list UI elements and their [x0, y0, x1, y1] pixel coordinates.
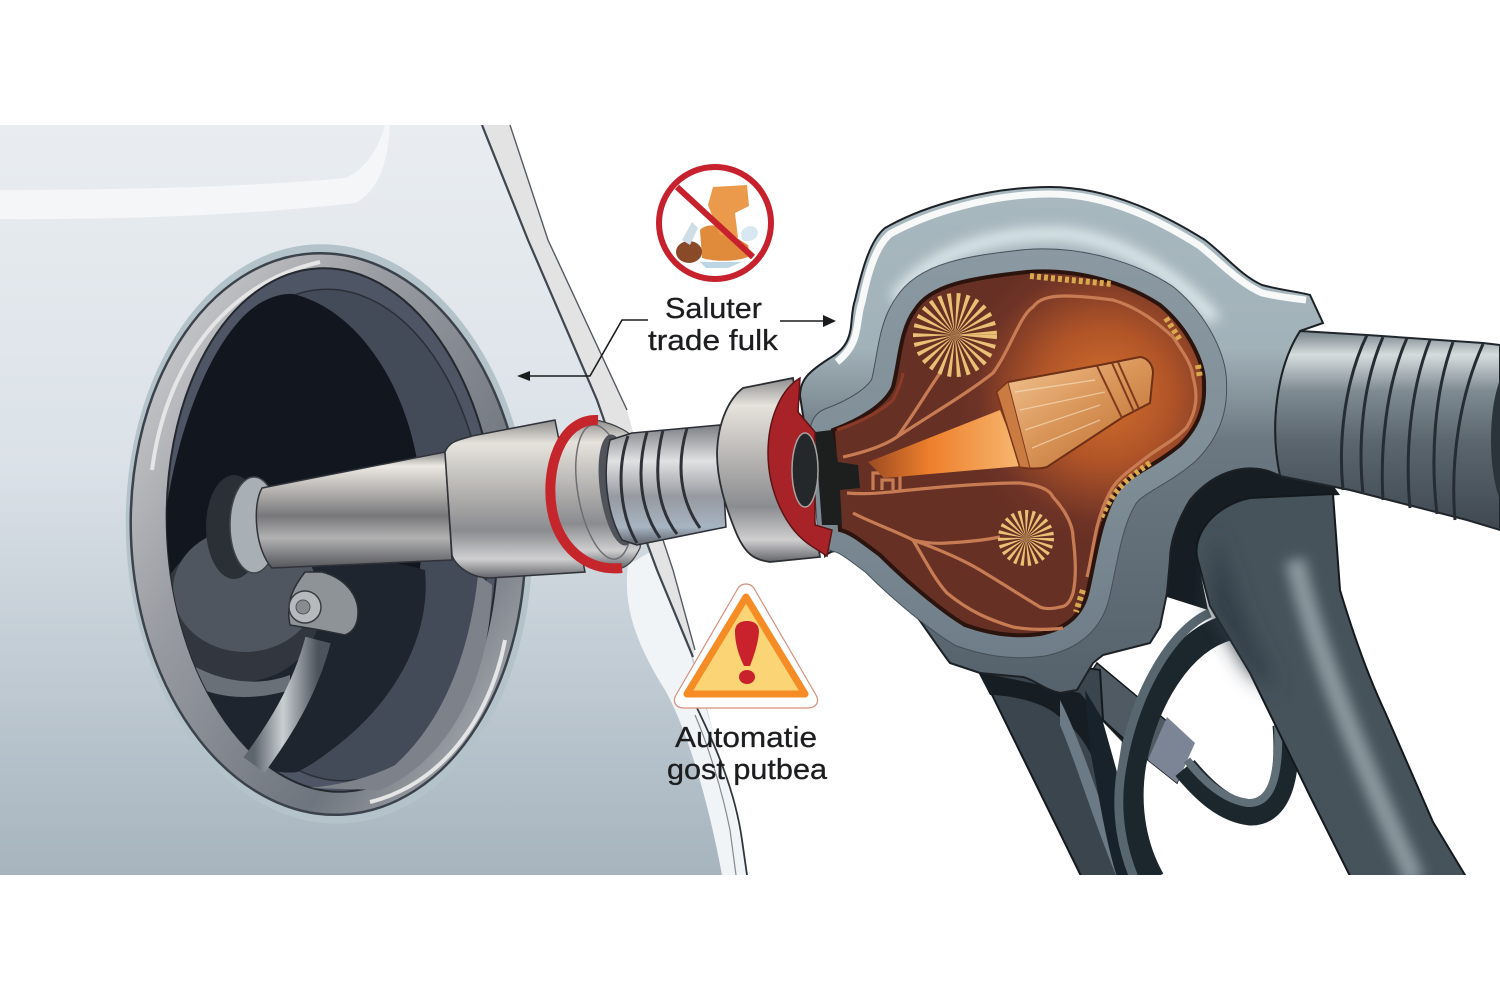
car body panel	[0, 125, 748, 875]
spout tube	[256, 452, 452, 568]
prohibition sign	[659, 167, 771, 279]
nozzle body	[717, 187, 1323, 693]
lever sleeve	[1148, 717, 1195, 783]
gold deposits	[1030, 276, 1200, 612]
fuel hose	[1275, 331, 1500, 530]
exclamation mark	[735, 621, 759, 684]
warning sign	[674, 584, 818, 708]
dark interior	[162, 294, 422, 773]
handle shading	[1210, 530, 1280, 690]
starburst upper	[934, 314, 976, 356]
caption: Automatie gost putbea: gost putbea	[667, 754, 828, 786]
tank inner shape	[170, 562, 316, 682]
rim highlights	[152, 262, 505, 802]
glowing flow cone	[868, 410, 1022, 478]
red flange	[768, 378, 832, 556]
nozzle trigger and handle	[970, 440, 1468, 880]
copper valve	[997, 357, 1153, 468]
gap between strut and link	[1103, 722, 1122, 772]
illustration	[0, 125, 1500, 880]
trigger guard	[1131, 627, 1230, 880]
callout: Saluter trade fulk	[517, 293, 836, 381]
hose ribs	[1341, 335, 1483, 520]
cutaway rim	[833, 271, 1204, 635]
left arm highlight	[1060, 700, 1116, 875]
nozzle spout	[206, 420, 726, 579]
soft highlight on shoulder	[895, 234, 1215, 320]
bolt	[289, 572, 358, 635]
large collar	[445, 420, 585, 578]
handle arm	[1197, 494, 1468, 880]
red seal	[550, 420, 622, 568]
fuel filler opening	[126, 244, 531, 824]
prohibited debris icon	[676, 185, 758, 268]
nozzle opening	[792, 433, 818, 507]
copper tubes	[837, 296, 1196, 629]
left arm shadow	[978, 674, 1091, 754]
starburst lower	[1012, 524, 1040, 552]
filler pipe	[254, 640, 318, 765]
caption: Automatie gost putbea: Automatie	[675, 722, 817, 754]
trigger loop	[1185, 725, 1286, 813]
left lever arm	[991, 668, 1124, 875]
outer halo	[126, 244, 531, 824]
arrow right	[780, 315, 836, 327]
arrow left	[517, 320, 648, 381]
spout base collar	[206, 475, 248, 579]
lower panel reflection	[627, 545, 748, 875]
dark strut	[1085, 690, 1128, 875]
lever link	[1093, 662, 1186, 784]
callout: Saluter trade fulk: Saluter	[665, 293, 762, 325]
spring section	[606, 425, 726, 545]
body panel highlight	[0, 125, 390, 219]
stepped metal ring	[561, 420, 641, 569]
dark inset ring	[598, 434, 630, 546]
callout: Saluter trade fulk: trade fulk	[648, 325, 779, 357]
dark inlet block	[815, 430, 860, 525]
cutaway interior	[815, 271, 1204, 635]
caption: Automatie gost putbea	[667, 722, 828, 786]
panel seam	[482, 125, 747, 875]
infographic canvas	[0, 125, 1500, 875]
under-body shadow	[1167, 469, 1340, 610]
white edge highlight	[837, 194, 1306, 362]
nozzle mouth collar	[717, 378, 820, 562]
metal rim	[117, 243, 539, 825]
